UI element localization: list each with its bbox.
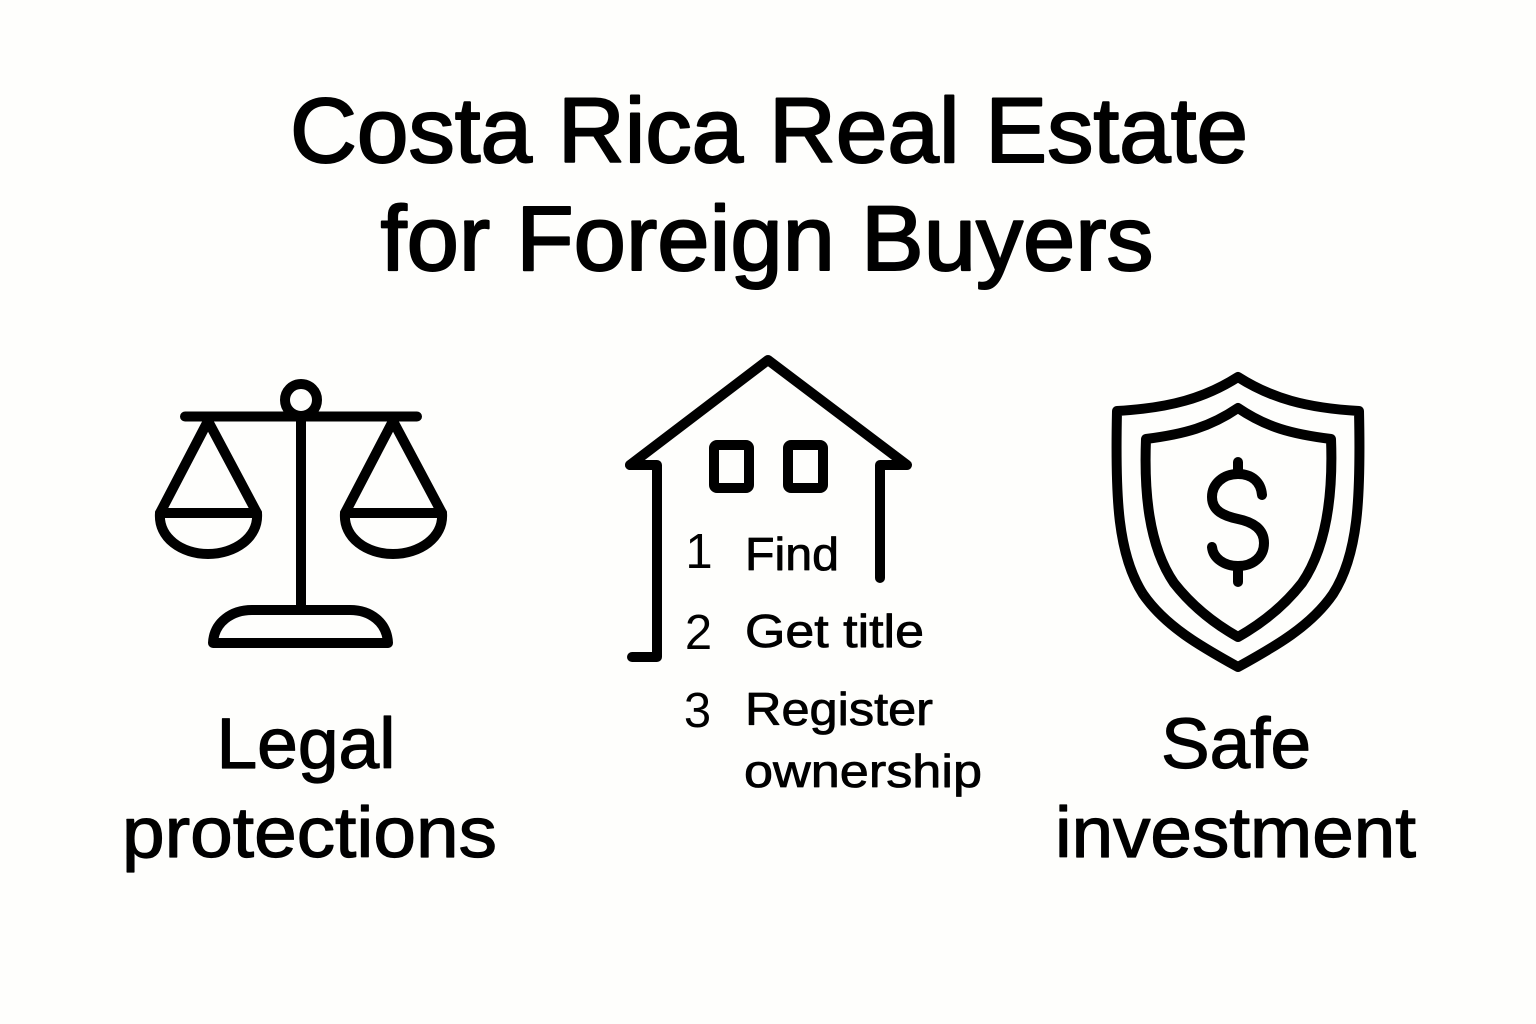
step 3: 3: [684, 684, 711, 738]
step 2: 2: [685, 606, 712, 660]
label: legal protections: Legal: [216, 705, 396, 784]
step 2: [685, 605, 924, 660]
title: for Foreign Buyers: [380, 188, 1154, 290]
step 3: ownership: [744, 745, 982, 797]
label: legal protections: protections: [122, 794, 497, 873]
step 3: Register: [745, 683, 933, 735]
label: safe investment: [1055, 705, 1416, 873]
icon: shield with dollar sign: [1116, 377, 1360, 667]
title: [290, 80, 1248, 290]
step 1: [685, 525, 839, 580]
step 1: 1: [685, 525, 713, 579]
title: Costa Rica Real Estate: [290, 80, 1248, 182]
step 1: Find: [745, 528, 839, 580]
step 2: Get title: [745, 605, 924, 657]
step 3: [684, 683, 982, 797]
label: safe investment: Safe: [1161, 705, 1311, 784]
icon: house outline: [630, 360, 907, 657]
icon: balance scales: [160, 384, 442, 643]
steps list: [684, 525, 982, 797]
label: safe investment: investment: [1055, 794, 1416, 873]
label: legal protections: [122, 705, 497, 873]
